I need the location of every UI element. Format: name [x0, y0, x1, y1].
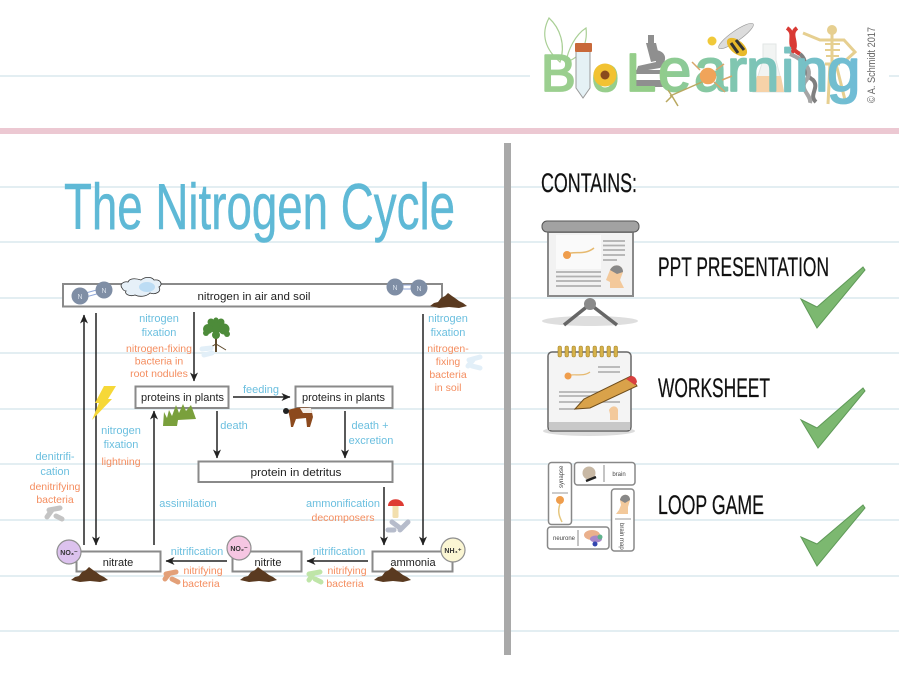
icon: check 2: [801, 388, 865, 448]
label: nitrogen fixation soil: fixation: [431, 327, 465, 339]
icon: pale bacteria soil: [468, 357, 480, 368]
label: nitrification left: nitrification: [171, 546, 223, 558]
logo wordmark: o: [592, 49, 619, 102]
label: nitrifying bacteria left: nitrifying: [183, 565, 223, 577]
card: neurone: neurone: [553, 536, 576, 542]
box: proteins in animals: proteins in plants: [302, 392, 385, 404]
box: nitrogen in air and soil: [63, 284, 442, 306]
icon: test tube: [575, 43, 592, 98]
label: nitrogen-fixing bacteria in root nodules: root nodules: [130, 368, 188, 380]
icon: green bacteria: [309, 572, 321, 582]
icon: soil nitrate: [71, 567, 108, 582]
badge: NH4: NH₄⁺: [444, 548, 462, 555]
label: nitrogen fixation root: nitrogen: [139, 313, 179, 325]
box: protein in detritus: protein in detritus: [250, 467, 342, 479]
card: brain map: brain map: [618, 523, 624, 550]
label: death and excretion: excretion: [349, 435, 393, 447]
box: proteins in plants: [136, 386, 228, 408]
icon: orange bacteria: [165, 572, 178, 582]
badge: NO2: NO₂⁻: [230, 546, 248, 553]
icon: soil top right: [430, 293, 467, 308]
label: nitrogen-fixing bacteria in root nodules: nitrogen-fixing: [126, 343, 192, 355]
label: denitrifying bacteria: denitrifying: [30, 481, 81, 493]
box: proteins in plants: proteins in plants: [141, 392, 224, 404]
arrow: lightning fixation: [95, 313, 97, 545]
title: The Nitrogen Cycle: [64, 170, 455, 243]
label: nitrogen fixation lightning: fixation: [104, 439, 138, 451]
box: ammonia: ammonia: [390, 557, 436, 569]
logo wordmark: earning: [658, 37, 860, 104]
label: decomposers: decomposers: [311, 512, 375, 524]
arrow: ammonification: [383, 487, 385, 545]
label: nitrifying bacteria right: bacteria: [326, 578, 364, 590]
card: brain: brain: [612, 472, 626, 478]
label: nitrogen fixation lightning: nitrogen: [101, 425, 141, 437]
arrow: assimilation: [153, 411, 155, 545]
card: synapse: synapse: [559, 465, 565, 488]
label: worksheet: WORKSHEET: [658, 373, 770, 403]
arrow: feeding: [233, 396, 290, 398]
box: proteins in animals: [296, 386, 392, 408]
icon: cow: [283, 407, 313, 427]
icon: cloud: [121, 277, 161, 296]
label: nitrogen-fixing bacteria in soil: nitrogen-: [427, 343, 469, 355]
label: denitrification: denitrifi-: [35, 451, 75, 463]
label: nitrogen fixation root: fixation: [142, 327, 176, 339]
label: nitrogen-fixing bacteria in soil: bacteria: [429, 369, 467, 381]
arrow: death: [216, 411, 218, 458]
label: lightning: lightning: [101, 456, 141, 468]
label: denitrification: cation: [40, 466, 70, 478]
badge: NO2: [227, 536, 251, 560]
icon: check 1: [801, 267, 865, 328]
icon: pale bacteria root: [202, 348, 212, 355]
arrow: denitrification: [83, 315, 85, 545]
icon: N2 molecule right: N: [416, 286, 422, 293]
icon: soil ammonia: [374, 567, 411, 582]
icon: N2 molecule right: N: [392, 285, 398, 292]
arrow: nitrification to nitrite: [307, 560, 368, 562]
icon: bee: [708, 20, 756, 60]
icon: presentation board: [542, 221, 639, 326]
box: nitrogen in air and soil: nitrogen in air and soil: [198, 291, 310, 303]
label: feeding: feeding: [243, 384, 279, 396]
icon: gray bacteria: [47, 508, 62, 519]
badge: NO3: NO₃⁻: [60, 550, 78, 557]
label: death: death: [220, 420, 248, 432]
divider: [504, 143, 511, 655]
label: nitrogen-fixing bacteria in root nodules: bacteria in: [135, 356, 183, 368]
copyright: © A. Schmidt 2017: [866, 27, 878, 103]
icon: N2 molecule left: N: [101, 288, 107, 295]
label: nitrogen fixation soil: nitrogen: [428, 313, 468, 325]
label: nitrogen-fixing bacteria in soil: in soil: [435, 382, 461, 394]
badge: NH4: [441, 538, 465, 562]
arrow: nitrogen fixation root: [193, 312, 195, 381]
label: death and excretion: death +: [351, 420, 389, 432]
icon: loop game cards: [548, 462, 635, 551]
box: nitrite: [232, 552, 302, 572]
icon: flask: [753, 44, 784, 92]
icon: soil nitrite: [240, 567, 277, 582]
label: nitrification right: nitrification: [313, 546, 365, 558]
icon: skeleton: [803, 26, 855, 104]
icon: sunflower: [594, 64, 616, 86]
arrow: nitrification to nitrate: [166, 560, 227, 562]
icon: neuron: [666, 62, 732, 106]
box: ammonia: [372, 552, 452, 572]
icon: mushroom: [388, 499, 404, 518]
icon: DNA helix: [787, 28, 816, 103]
heading: contains: CONTAINS:: [541, 168, 637, 198]
label: nitrogen-fixing bacteria in soil: fixing: [436, 356, 460, 368]
logo wordmark: B: [541, 45, 576, 103]
box: nitrate: nitrate: [103, 557, 133, 569]
icon: decomposer bacteria: [388, 522, 408, 530]
box: nitrite: nitrite: [255, 557, 281, 569]
label: nitrifying bacteria left: bacteria: [182, 578, 220, 590]
arrow: soil fixation: [422, 314, 424, 545]
arrow: death and excretion: [344, 411, 346, 458]
label: assimilation: assimilation: [159, 498, 217, 510]
label: ammonification: ammonification: [306, 498, 380, 510]
icon: N2 molecule left: N: [77, 294, 83, 301]
icon: microscope: [632, 35, 666, 87]
logo: BioLearning: [541, 18, 878, 106]
icon: N2 molecule right: [386, 278, 428, 296]
logo wordmark: L: [626, 43, 656, 103]
icon: leaves: [545, 18, 586, 62]
logo wordmark: i: [578, 45, 590, 103]
badge: NO3: [57, 540, 81, 564]
label: denitrifying bacteria: bacteria: [36, 494, 74, 506]
icon: tree: [203, 318, 230, 352]
label: nitrifying bacteria right: nitrifying: [327, 565, 367, 577]
icon: check 3: [801, 505, 865, 566]
box: nitrate: [76, 552, 160, 572]
icon: notepad with pencil: [543, 346, 637, 436]
label: loop game: LOOP GAME: [658, 490, 764, 520]
nitrogen cycle diagram: [30, 277, 480, 590]
icon: lightning: [92, 386, 116, 420]
icon: grass: [163, 404, 196, 426]
box: protein in detritus: [198, 462, 392, 482]
icon: N2 molecule left: [72, 282, 112, 304]
